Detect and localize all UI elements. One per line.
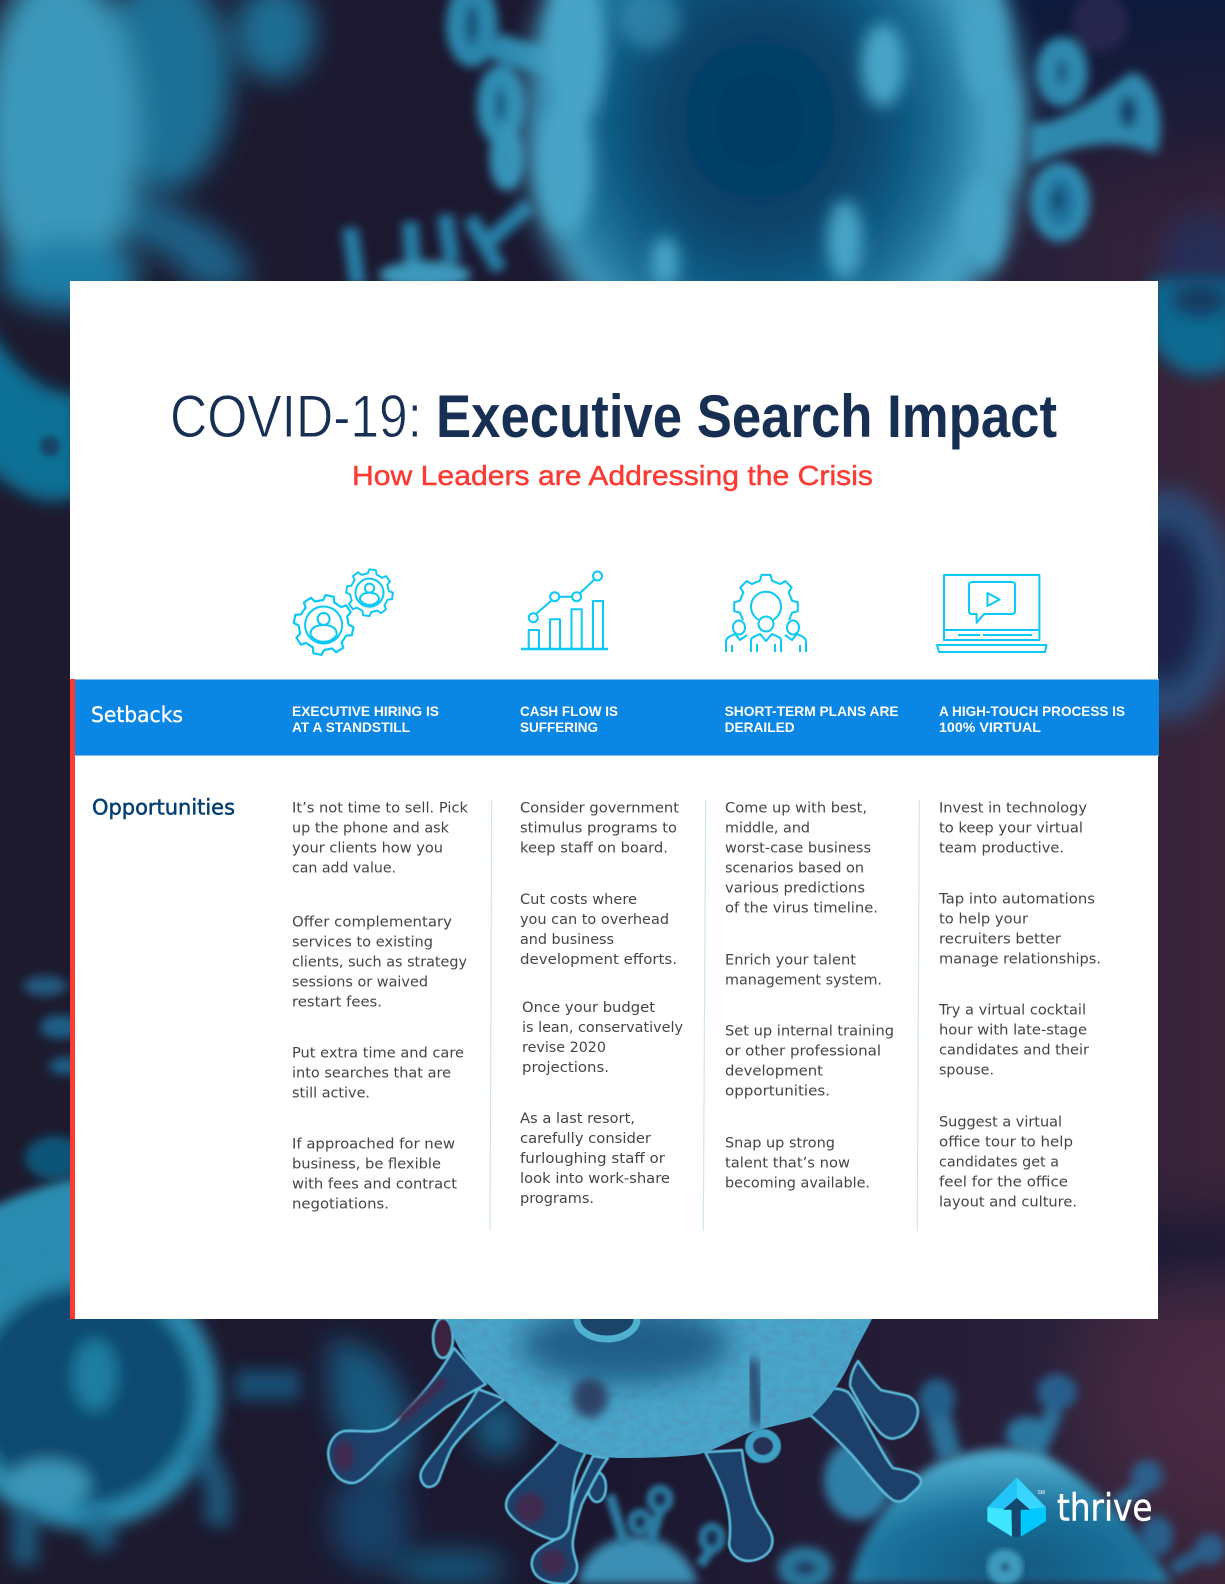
column 4 opportunities: feel for the office (939, 1174, 1068, 1190)
column 2 opportunities: Cut costs where (520, 892, 637, 908)
blurred virus: top left (0, 0, 315, 310)
column 1 opportunities: can add value. (292, 860, 396, 876)
setback: cash flow: CASH FLOW IS (520, 703, 618, 719)
setback: cash flow: SUFFERING (520, 719, 598, 735)
column 4 opportunities (938, 800, 1101, 1210)
column 4 opportunities: recruiters better (939, 931, 1061, 947)
column 4 opportunities: Suggest a virtual (939, 1114, 1062, 1130)
blurred virus: behind centre (330, 1340, 722, 1584)
column 3 opportunities: various predictions (725, 880, 865, 896)
icon: growth chart (521, 572, 608, 649)
setback: executive hiring (292, 703, 439, 735)
blurred virus: bottom left (0, 1273, 300, 1565)
title: Executive Search Impact (436, 383, 1057, 450)
column 3 opportunities: management system. (725, 972, 882, 988)
column 3 opportunities: or other professional (725, 1044, 881, 1060)
column 1 opportunities: sessions or waived (292, 974, 428, 990)
column 2 opportunities: is lean, conservatively (522, 1020, 683, 1036)
left small loop (433, 1318, 453, 1358)
blurred virus: large top centre (525, 0, 1025, 400)
setback: short-term plans (725, 703, 899, 735)
column 2 opportunities: Once your budget (522, 1000, 655, 1016)
logo: thrive (987, 1477, 1152, 1537)
red accent bar (70, 679, 75, 1319)
setback: executive hiring: EXECUTIVE HIRING IS (292, 703, 439, 719)
column 1 opportunities: negotiations. (292, 1196, 389, 1212)
column 4 opportunities: candidates and their (939, 1042, 1089, 1058)
blurred virus: bottom right (785, 1382, 1218, 1584)
column 2 opportunities: stimulus programs to (520, 820, 677, 836)
column 3 opportunities: Snap up strong (725, 1135, 835, 1151)
logo: thrive: SM (1038, 1490, 1045, 1496)
column 1 opportunities: restart fees. (292, 994, 382, 1010)
column 2 opportunities: keep staff on board. (520, 840, 668, 856)
column 3 opportunities: Come up with best, (725, 800, 867, 816)
icon: laptop with video bubble (937, 575, 1046, 652)
column 1 opportunities: services to existing (292, 934, 433, 950)
opportunities heading: Opportunities (92, 796, 235, 820)
bulb on body (749, 1433, 777, 1459)
column 1 opportunities: still active. (292, 1085, 370, 1101)
column 3 opportunities: middle, and (725, 820, 810, 836)
column 2 opportunities: programs. (520, 1191, 594, 1207)
column 3 opportunities: development (725, 1064, 823, 1080)
column 1 opportunities: clients, such as strategy (292, 954, 467, 970)
setback: high-touch process: A HIGH-TOUCH PROCESS IS (939, 703, 1125, 719)
panel: main white card (70, 281, 1158, 1319)
column 3 opportunities: Set up internal training (725, 1024, 894, 1040)
column 2 opportunities: and business (520, 932, 614, 948)
setback: executive hiring: AT A STANDSTILL (292, 719, 410, 735)
column 3 opportunities: Enrich your talent (725, 952, 856, 968)
band: setbacks row (75, 679, 1159, 756)
column 1 opportunities: into searches that are (292, 1065, 451, 1081)
column 4 opportunities: Invest in technology (939, 800, 1087, 816)
column 2 opportunities: carefully consider (520, 1131, 651, 1147)
column 4 opportunities: Tap into automations (938, 891, 1095, 907)
column 2 opportunities: you can to overhead (520, 912, 669, 928)
column 1 opportunities: up the phone and ask (292, 820, 450, 836)
ring on body (577, 1299, 637, 1339)
column 4 opportunities: manage relationships. (939, 951, 1101, 967)
spikes (328, 1348, 921, 1584)
column 1 opportunities: with fees and contract (292, 1176, 457, 1192)
blurred virus: left edge (0, 310, 85, 1325)
column 2 opportunities: furloughing staff or (520, 1151, 665, 1167)
column 2 opportunities: development efforts. (520, 952, 677, 968)
column 2 opportunities: look into work-share (520, 1171, 670, 1187)
column 4 opportunities: Try a virtual cocktail (938, 1002, 1086, 1018)
setback: short-term plans: DERAILED (725, 719, 795, 735)
setback: high-touch process: 100% VIRTUAL (939, 719, 1041, 735)
icon: team with gear (722, 575, 810, 656)
column 2 opportunities: revise 2020 (522, 1040, 606, 1056)
column 1 opportunities: If approached for new (292, 1136, 455, 1152)
column 2 opportunities: projections. (522, 1060, 609, 1076)
setback: high-touch process (939, 703, 1125, 735)
subtitle: How Leaders are Addressing the Crisis (352, 460, 873, 491)
body (446, 1310, 876, 1458)
column 4 opportunities: spouse. (939, 1062, 994, 1078)
column 3 opportunities: of the virus timeline. (725, 900, 878, 916)
title (170, 383, 1057, 450)
column 3 opportunities: scenarios based on (725, 860, 864, 876)
column 2 opportunities: Consider government (520, 800, 679, 816)
column 4 opportunities: office tour to help (939, 1134, 1073, 1150)
column 4 opportunities: to keep your virtual (939, 820, 1083, 836)
setbacks label: Setbacks (91, 703, 183, 727)
icon: gears with people (288, 567, 396, 660)
column 1 opportunities: your clients how you (292, 840, 443, 856)
column 3 opportunities: becoming available. (725, 1175, 870, 1191)
column 3 opportunities: opportunities. (725, 1084, 830, 1100)
sharp virus: bottom centre (328, 1299, 921, 1584)
column 3 opportunities (725, 800, 894, 1191)
blurred virus: top centre left spikes (350, 0, 565, 289)
column 1 opportunities: business, be flexible (292, 1156, 441, 1172)
blurred virus: far right top (1160, 210, 1225, 330)
logo: thrive: thrive (1057, 1487, 1152, 1530)
title: COVID-19: (170, 383, 422, 450)
column 4 opportunities: to help your (939, 911, 1028, 927)
spike shading (334, 1380, 566, 1575)
column 4 opportunities: team productive. (939, 840, 1064, 856)
column 4 opportunities: layout and culture. (939, 1194, 1077, 1210)
column 2 opportunities (520, 800, 683, 1207)
column 1 opportunities: It’s not time to sell. Pick (292, 800, 469, 816)
column 2 opportunities: As a last resort, (520, 1111, 635, 1127)
small gear (343, 567, 396, 619)
column 1 opportunities (292, 800, 469, 1212)
blurred virus: right edge (1107, 280, 1225, 705)
blurred virus: top centre right spikes (1030, 0, 1161, 234)
large gear (288, 590, 359, 660)
setback: short-term plans: SHORT-TERM PLANS ARE (725, 703, 899, 719)
column 4 opportunities: hour with late-stage (939, 1022, 1087, 1038)
body shadows (520, 1307, 758, 1425)
column 4 opportunities: candidates get a (939, 1154, 1059, 1170)
column 3 opportunities: talent that’s now (725, 1155, 850, 1171)
column 1 opportunities: Offer complementary (292, 914, 452, 930)
setback: cash flow (520, 703, 618, 735)
column 3 opportunities: worst-case business (725, 840, 871, 856)
column 1 opportunities: Put extra time and care (292, 1045, 464, 1061)
